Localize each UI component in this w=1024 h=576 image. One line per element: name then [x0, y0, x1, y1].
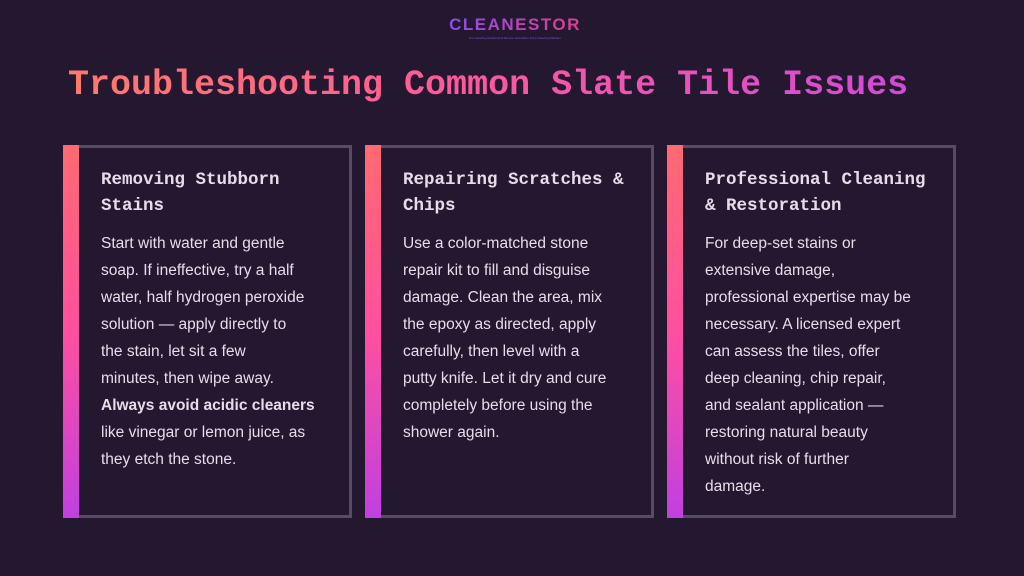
text: scratches — [403, 235, 606, 441]
text: professional: without risk of further — [705, 451, 849, 468]
heading: professional: & Restoration — [705, 196, 842, 216]
text: scratches: Use a color-matched stone — [403, 235, 588, 252]
text: professional — [705, 235, 911, 495]
text: professional: can assess the tiles, offer — [705, 343, 880, 360]
text: professional: professional expertise may be — [705, 289, 911, 306]
text: scratches: the epoxy as directed, apply — [403, 316, 596, 333]
text: stains: they etch the stone. — [101, 451, 236, 468]
text: professional: necessary. A licensed expert — [705, 316, 900, 333]
text: scratches: repair kit to fill and disguise — [403, 262, 590, 279]
heading: scratches: Repairing Scratches & — [403, 170, 624, 190]
panel: removing stains — [63, 145, 352, 518]
text: professional: deep cleaning, chip repair, — [705, 370, 886, 387]
heading: professional — [705, 170, 926, 216]
logo: Pro Cleaning Guides And Service Journalism From Cleaning Masters — [469, 36, 561, 40]
text: professional: For deep-set stains or — [705, 235, 856, 252]
text: stains: water, half hydrogen peroxide — [101, 289, 304, 306]
text: stains: Start with water and gentle — [101, 235, 285, 252]
panel: repairing scratches — [365, 145, 654, 518]
panel: professional cleaning — [667, 145, 956, 518]
text: professional: restoring natural beauty — [705, 424, 868, 441]
logo: CLEANESTOR — [449, 15, 581, 34]
text: stains: solution — apply directly to — [101, 316, 286, 333]
text: professional: extensive damage, — [705, 262, 835, 279]
text: scratches: carefully, then level with a — [403, 343, 579, 360]
text: scratches: shower again. — [403, 424, 500, 441]
text: stains: minutes, then wipe away. — [101, 370, 274, 387]
heading: professional: Professional Cleaning — [705, 170, 926, 190]
text: stains: Always avoid acidic cleaners — [101, 397, 315, 414]
title: Troubleshooting Common Slate Tile Issues — [68, 65, 908, 105]
text: scratches: putty knife. Let it dry and cure — [403, 370, 606, 387]
text: scratches: completely before using the — [403, 397, 593, 414]
text: stains: the stain, let sit a few — [101, 343, 246, 360]
heading: stains: Stains — [101, 196, 164, 216]
heading: scratches — [403, 170, 624, 216]
text: professional: and sealant application — — [705, 397, 883, 414]
heading: stains — [101, 170, 280, 216]
text: stains: like vinegar or lemon juice, as — [101, 424, 305, 441]
heading: stains: Removing Stubborn — [101, 170, 280, 190]
heading: scratches: Chips — [403, 196, 456, 216]
text: stains — [101, 235, 315, 468]
text: scratches: damage. Clean the area, mix — [403, 289, 602, 306]
text: stains: soap. If ineffective, try a half — [101, 262, 294, 279]
text: professional: damage. — [705, 478, 765, 495]
